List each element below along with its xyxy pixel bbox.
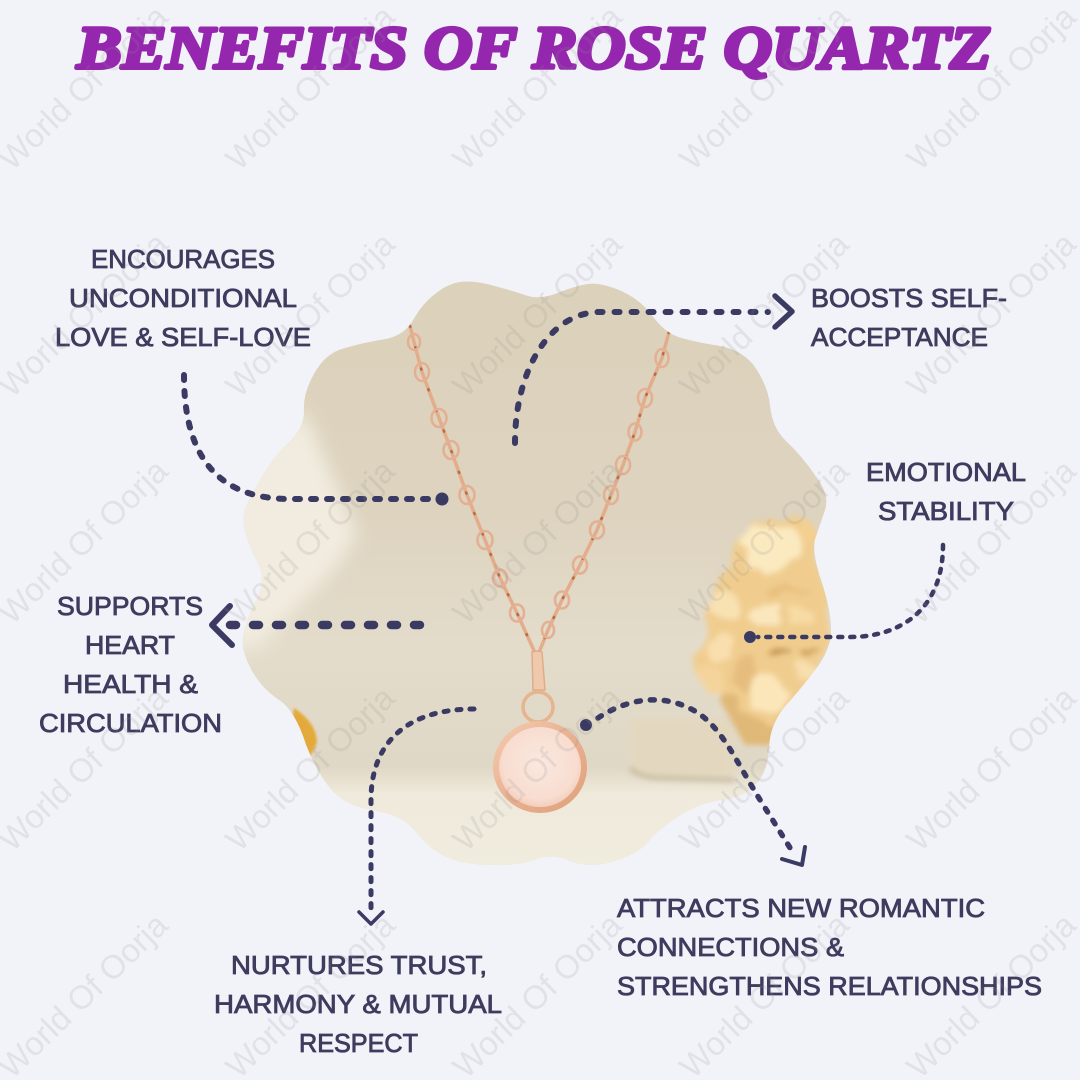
- rose quartz pendant: [493, 721, 587, 813]
- pendant link: [532, 651, 545, 690]
- text: nurtures trust: NURTURES TRUST,: [231, 950, 487, 980]
- watermark grid: World Of Oorja: [218, 225, 402, 404]
- watermark grid: World Of Oorja: [672, 0, 856, 177]
- rose gold chain: [408, 326, 669, 655]
- text: supports heart health: HEALTH &: [63, 669, 198, 699]
- text: supports heart health: CIRCULATION: [39, 708, 222, 738]
- arrow: nurtures trust: [359, 709, 474, 924]
- text: attracts romantic connections: [617, 893, 1042, 1001]
- text: supports heart health: [39, 591, 222, 738]
- text: supports heart health: HEART: [85, 630, 175, 660]
- text: nurtures trust: HARMONY & MUTUAL: [214, 989, 502, 1019]
- white cloth at left: [243, 412, 360, 650]
- arrow: supports heart health: [212, 606, 420, 645]
- watermark grid: World Of Oorja: [672, 906, 856, 1080]
- watermark grid: World Of Oorja: [218, 679, 402, 858]
- text: attracts romantic connections: CONNECTIONS &: [617, 932, 844, 962]
- text: encourages unconditional love: UNCONDITIONAL: [69, 283, 297, 313]
- watermark grid: World Of Oorja: [445, 452, 629, 631]
- watermark grid: World Of Oorja: [445, 225, 629, 404]
- watermark grid: World Of Oorja: [218, 906, 402, 1080]
- text: encourages unconditional love: [55, 244, 311, 352]
- text: encourages unconditional love: LOVE & SELF-LOVE: [55, 322, 311, 352]
- text: boosts self-acceptance: ACCEPTANCE: [811, 322, 988, 352]
- watermark grid: World Of Oorja: [445, 906, 629, 1080]
- watermark grid: World Of Oorja: [218, 0, 402, 177]
- arrow: boosts self-acceptance: [515, 296, 792, 443]
- watermark grid: World Of Oorja: [445, 0, 629, 177]
- watermark grid: World Of Oorja: [445, 679, 629, 858]
- scalloped photo panel: necklace: [215, 275, 840, 875]
- dried yellow flower: [696, 519, 833, 745]
- text: nurtures trust: [214, 950, 502, 1058]
- watermark grid: World Of Oorja: [899, 225, 1080, 404]
- arrow: encourages love: [184, 375, 448, 506]
- text: emotional stability: STABILITY: [878, 496, 1014, 526]
- watermark grid: World Of Oorja: [672, 679, 856, 858]
- text: attracts romantic connections: STRENGTHENS RELATIONSHIPS: [617, 971, 1042, 1001]
- text: boosts self-acceptance: [811, 283, 1007, 352]
- text: attracts romantic connections: ATTRACTS NEW ROMANTIC: [617, 893, 985, 923]
- watermark grid: World Of Oorja: [672, 225, 856, 404]
- watermark grid: World Of Oorja: [899, 452, 1080, 631]
- title: BENEFITS OF ROSE QUARTZ: [76, 15, 991, 81]
- watermark grid: World Of Oorja: [672, 452, 856, 631]
- blurred box in background: [630, 718, 735, 780]
- text: supports heart health: SUPPORTS: [57, 591, 203, 621]
- text: emotional stability: [866, 457, 1026, 526]
- photo backdrop: [230, 275, 840, 875]
- text: encourages unconditional love: ENCOURAGES: [91, 244, 275, 274]
- watermark grid: World Of Oorja: [899, 679, 1080, 858]
- arrow: attracts romantic connections: [580, 700, 805, 865]
- watermark grid: World Of Oorja: [899, 0, 1080, 177]
- pendant bail ring: [523, 692, 553, 722]
- gold object at lower left: [290, 708, 317, 760]
- arrow: emotional stability: [744, 545, 943, 643]
- text: nurtures trust: RESPECT: [299, 1028, 418, 1058]
- text: emotional stability: EMOTIONAL: [866, 457, 1026, 487]
- watermark grid: World Of Oorja: [218, 452, 402, 631]
- text: boosts self-acceptance: BOOSTS SELF-: [811, 283, 1007, 313]
